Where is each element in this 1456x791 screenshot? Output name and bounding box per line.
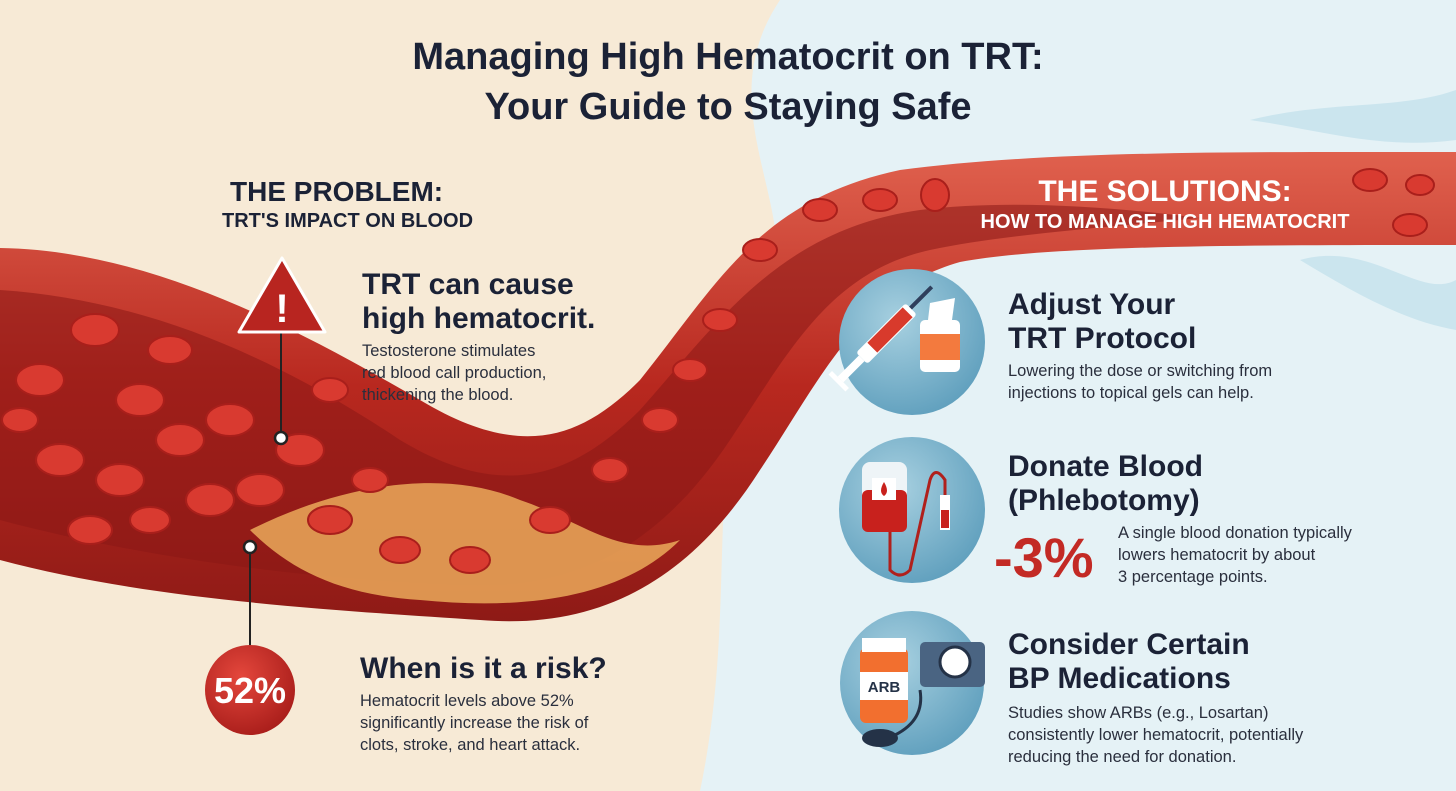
heading: the problem: THE PROBLEM: [230,176,443,207]
text: 3 percentage points. [1118,568,1268,586]
solution 3: Studies show ARBs (e.g., Losartan) [1008,704,1268,722]
icon circles [839,269,985,415]
solution 1: injections to topical gels can help. [1008,384,1254,402]
text: cause: TRT can cause [362,268,574,301]
text: cause: high hematocrit. [362,302,595,335]
heading: the solutions: HOW TO MANAGE HIGH HEMATOCRIT [981,211,1349,233]
solution 3: Consider Certain [1008,628,1250,661]
solution 1 [1008,288,1272,402]
text: cause: thickening the blood. [362,386,513,404]
solution 3: BP Medications [1008,662,1231,695]
background and vessel: ! [275,287,289,331]
heading: the problem [222,176,473,232]
stat: -3%: -3% [994,526,1094,589]
solution 2: Donate Blood [1008,450,1203,483]
title: Your Guide to Staying Safe [484,86,972,128]
solution 2 [1008,450,1203,517]
text: cause: Testosterone stimulates [362,342,535,360]
vessel band [0,152,1456,621]
heading: the solutions [981,175,1350,233]
heading: the problem: TRT'S IMPACT ON BLOOD [222,210,473,232]
blood bag [862,462,907,532]
solution 3: reducing the need for donation. [1008,748,1236,766]
text: lowers hematocrit by about [1118,546,1315,564]
text: risk: clots, stroke, and heart attack. [360,736,580,754]
background and vessel: ARB [868,679,900,696]
solution 1: Adjust Your [1008,288,1175,321]
text: cause [362,268,595,404]
solution 3: consistently lower hematocrit, potentially [1008,726,1303,744]
solution 1: Lowering the dose or switching from [1008,362,1272,380]
text: risk: significantly increase the risk of [360,714,588,732]
text: A single blood donation typically [1118,524,1352,542]
title: Managing High Hematocrit on TRT: [412,36,1044,78]
text: risk: Hematocrit levels above 52% [360,692,574,710]
52% circle & connectors [280,330,282,438]
solution 3 [1008,628,1304,766]
red cells [2,169,1434,573]
warning triangle [239,258,325,332]
title [412,36,1044,128]
syringe [828,279,941,392]
text: cause: red blood call production, [362,364,546,382]
ARB & BP [860,648,908,723]
stat: 52%: 52% [214,670,286,711]
text: risk [360,652,607,754]
solution 1: TRT Protocol [1008,322,1196,355]
text: risk: When is it a risk? [360,652,607,685]
heading: the solutions: THE SOLUTIONS: [1038,175,1292,208]
solution 2: (Phlebotomy) [1008,484,1200,517]
